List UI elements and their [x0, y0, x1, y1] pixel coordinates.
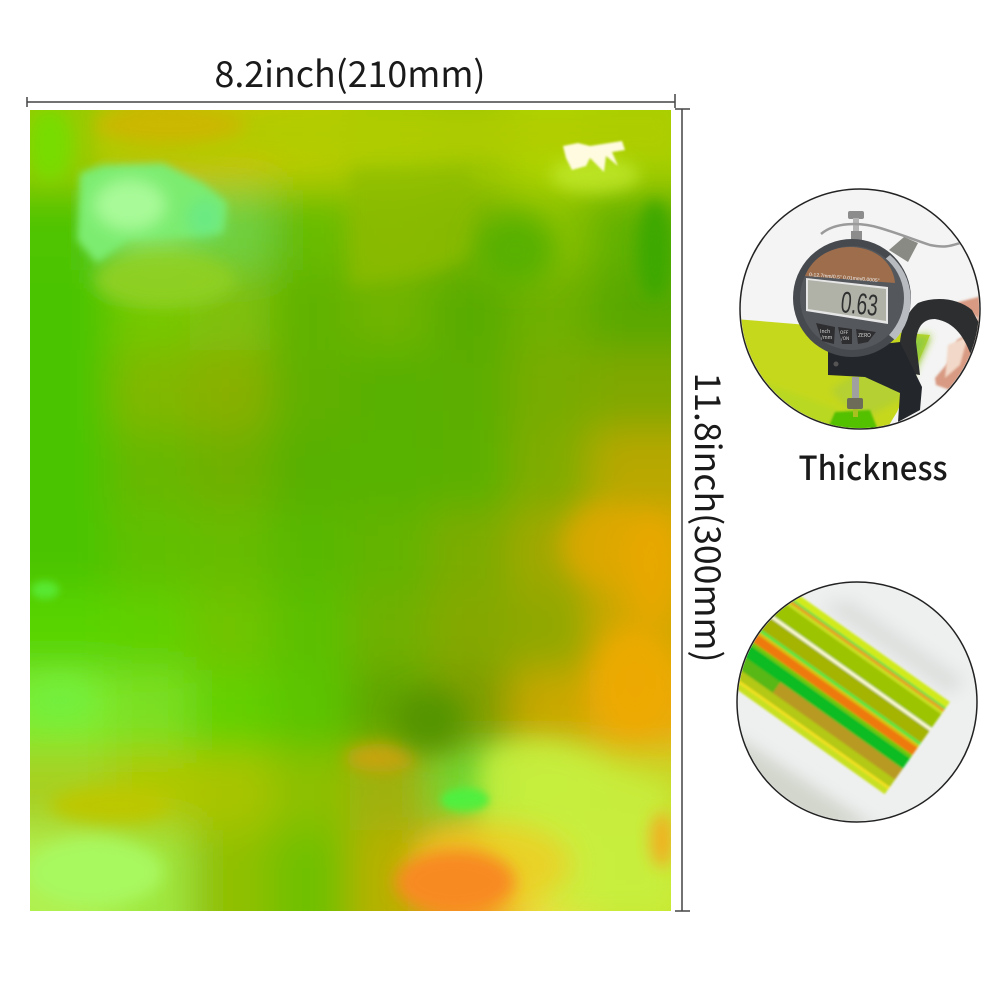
gauge buttons: Inch: [820, 328, 830, 335]
gauge frame bracket: [828, 342, 922, 422]
thickness caption: Thickness: [798, 442, 948, 490]
width dimension line: [27, 94, 675, 108]
finger highlight: [945, 336, 968, 378]
rolled film: [738, 596, 952, 796]
height label: 11.8inch(300mm): [684, 372, 736, 662]
backdrop shadow: [744, 736, 871, 821]
lcd scale text: 0-12.7mm/0.5" 0.01mm/0.0005": [809, 272, 880, 284]
hand fingers: [935, 296, 982, 390]
gauge buttons: ZERO: [858, 332, 871, 339]
gauge buttons: OFF: [840, 330, 849, 336]
holographic green sheet: [30, 110, 671, 911]
green patch on sheet: [828, 408, 878, 428]
lcd screen: [806, 278, 888, 324]
rolled sheet photo: [736, 581, 978, 823]
yellow sheet under gauge: [742, 320, 930, 428]
wire: [821, 224, 960, 246]
gauge buttons: [816, 323, 876, 344]
gauge buttons: /ON: [841, 336, 849, 342]
lcd reading: 0.63: [839, 286, 880, 323]
gauge body: [793, 239, 911, 357]
top knob and stem: [848, 211, 864, 219]
gauge frame arm: [900, 299, 980, 375]
spindle: [852, 377, 859, 398]
height dimension line: [675, 109, 690, 911]
width label: 8.2inch(210mm): [214, 46, 486, 98]
thickness photo: digital gauge: [735, 189, 982, 440]
gauge buttons: /mm: [821, 334, 833, 341]
